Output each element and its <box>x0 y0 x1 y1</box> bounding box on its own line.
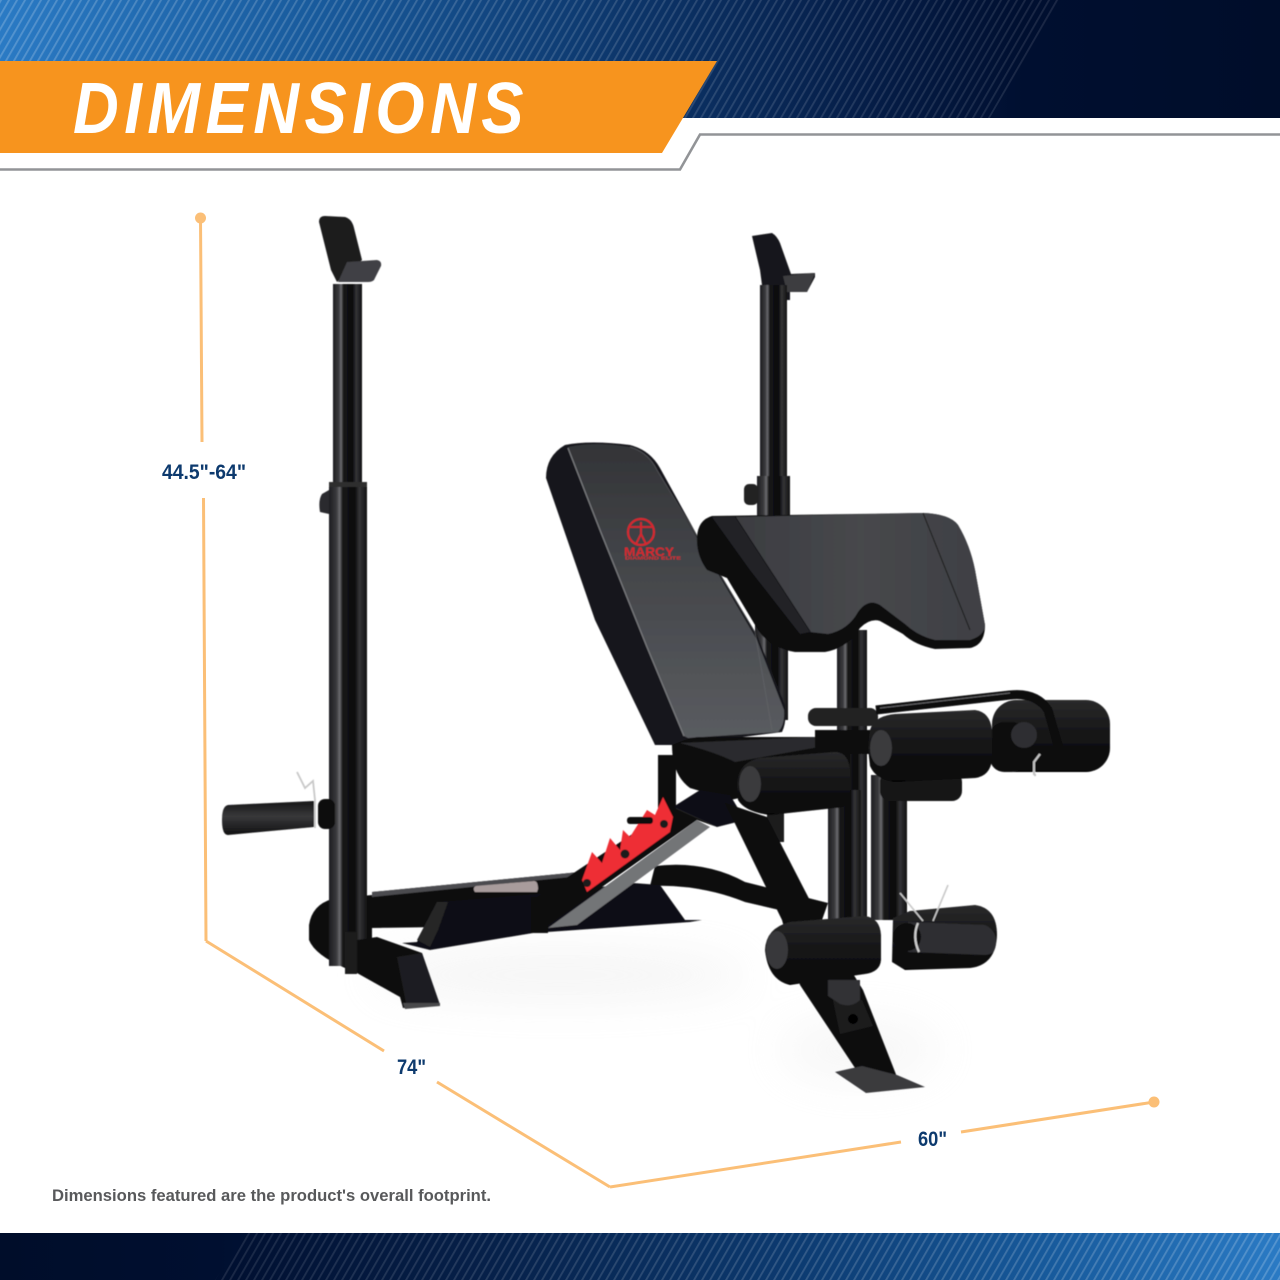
seat pad <box>672 737 850 800</box>
header band <box>0 0 1280 118</box>
lower weight peg <box>893 885 996 955</box>
footer band <box>0 1233 1280 1280</box>
rear lower roller <box>892 905 997 970</box>
foot plate <box>835 1066 925 1093</box>
curved lever bar <box>808 693 1087 775</box>
red adjustment bracket <box>582 797 673 892</box>
incline back pad <box>546 442 786 745</box>
label: width: 60" <box>918 1128 947 1151</box>
brand logo: DIAMOND ELITE <box>625 556 681 560</box>
right upright <box>744 233 815 842</box>
dimension line: height <box>195 212 206 941</box>
rear roller behind post <box>880 772 962 801</box>
center foot <box>402 883 702 950</box>
brand logo: MARCY <box>624 545 674 559</box>
middle roller <box>737 752 850 815</box>
title: DIMENSIONS <box>73 69 524 149</box>
front diagonal leg <box>725 803 897 1080</box>
header outline rule <box>0 134 1280 170</box>
back tubes behind pad <box>837 630 867 930</box>
product: weight bench <box>222 216 1110 1093</box>
left weight peg <box>222 772 335 835</box>
dimension line: length <box>206 941 610 1187</box>
dimension line: width <box>610 1096 1160 1187</box>
upper front roller <box>868 710 992 782</box>
footnote: Dimensions featured are the product's overall footprint. <box>52 1186 491 1205</box>
floor shadow <box>370 951 940 1080</box>
label: height: 44.5"-64" <box>162 461 246 484</box>
base frame <box>309 865 828 975</box>
left foot <box>345 932 440 1009</box>
label: length: 74" <box>397 1056 426 1079</box>
upper far roller <box>992 700 1110 772</box>
incline support arm <box>533 755 745 928</box>
title banner <box>0 61 717 153</box>
left upright <box>319 216 381 966</box>
leg tubes <box>815 730 907 1005</box>
preacher arm pad <box>697 513 985 652</box>
brand logo <box>624 519 681 560</box>
lower front roller <box>765 916 881 985</box>
